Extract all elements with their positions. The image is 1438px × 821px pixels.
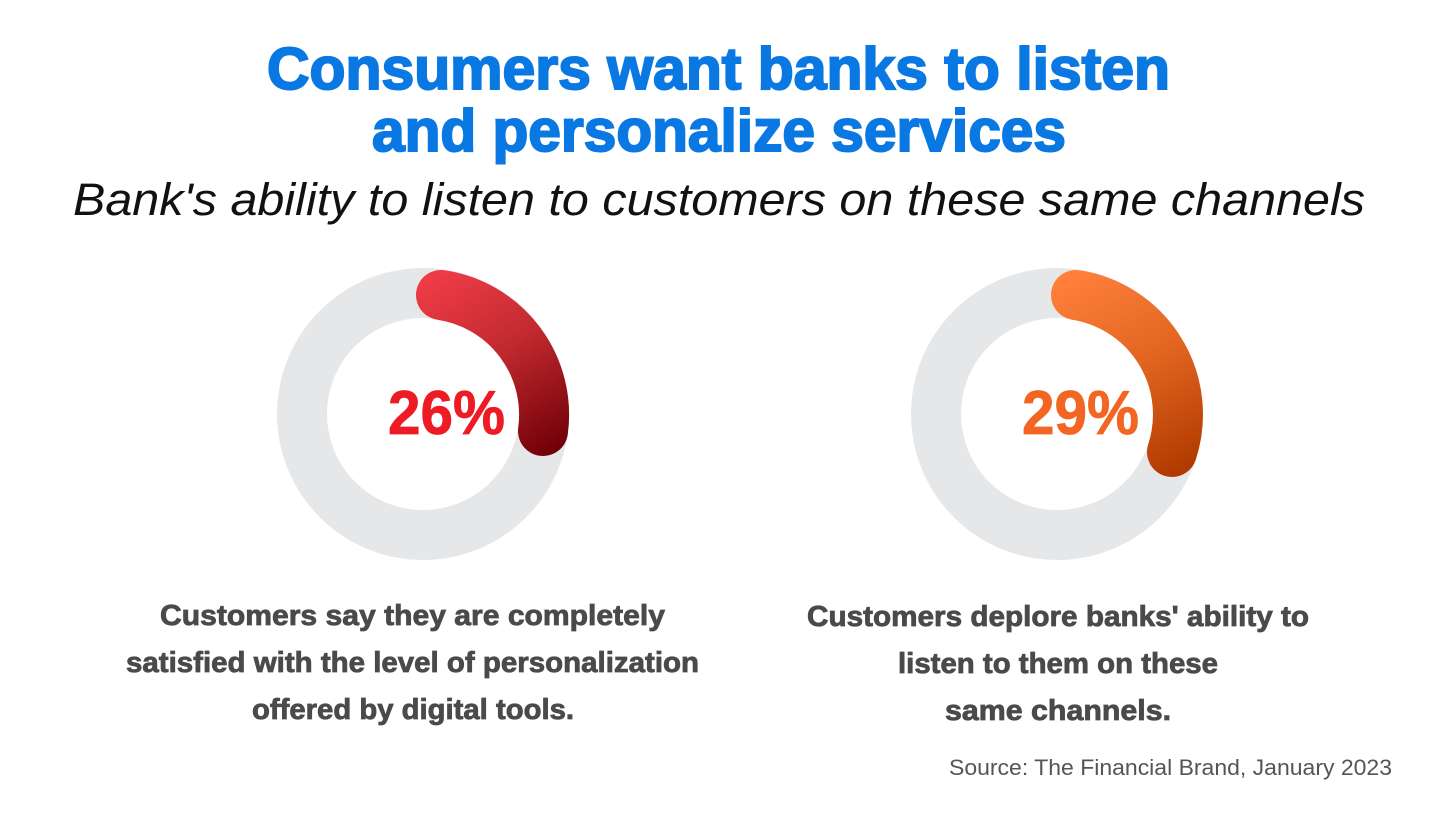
value: 29%: 29% <box>1022 379 1139 448</box>
value: 26%: 26% <box>388 379 505 448</box>
text block: listening ability: Customers deplore banks' ability to <box>807 601 1309 633</box>
source note: Source: The Financial Brand, January 2023 <box>949 755 1392 780</box>
text block: listening ability: same channels. <box>945 695 1171 727</box>
text block: personalization satisfaction: satisfied with the level of personalization <box>126 647 699 679</box>
donut value arc <box>1076 295 1178 452</box>
donut track <box>302 293 544 535</box>
text block: listening ability <box>807 601 1309 727</box>
text block: personalization satisfaction <box>126 600 699 726</box>
text block: listening ability: listen to them on these <box>898 648 1218 680</box>
title: and personalize services <box>372 98 1066 164</box>
panel: 29% donut chart <box>936 293 1178 535</box>
donut track <box>936 293 1178 535</box>
donut value arc <box>441 295 544 431</box>
text block: personalization satisfaction: offered by digital tools. <box>252 694 574 726</box>
title <box>267 36 1170 164</box>
panel: 26% donut chart <box>302 293 544 535</box>
text block: personalization satisfaction: Customers say they are completely <box>160 600 665 632</box>
title: Consumers want banks to listen <box>267 36 1170 102</box>
subtitle: Bank's ability to listen to customers on these same channels <box>73 174 1365 225</box>
